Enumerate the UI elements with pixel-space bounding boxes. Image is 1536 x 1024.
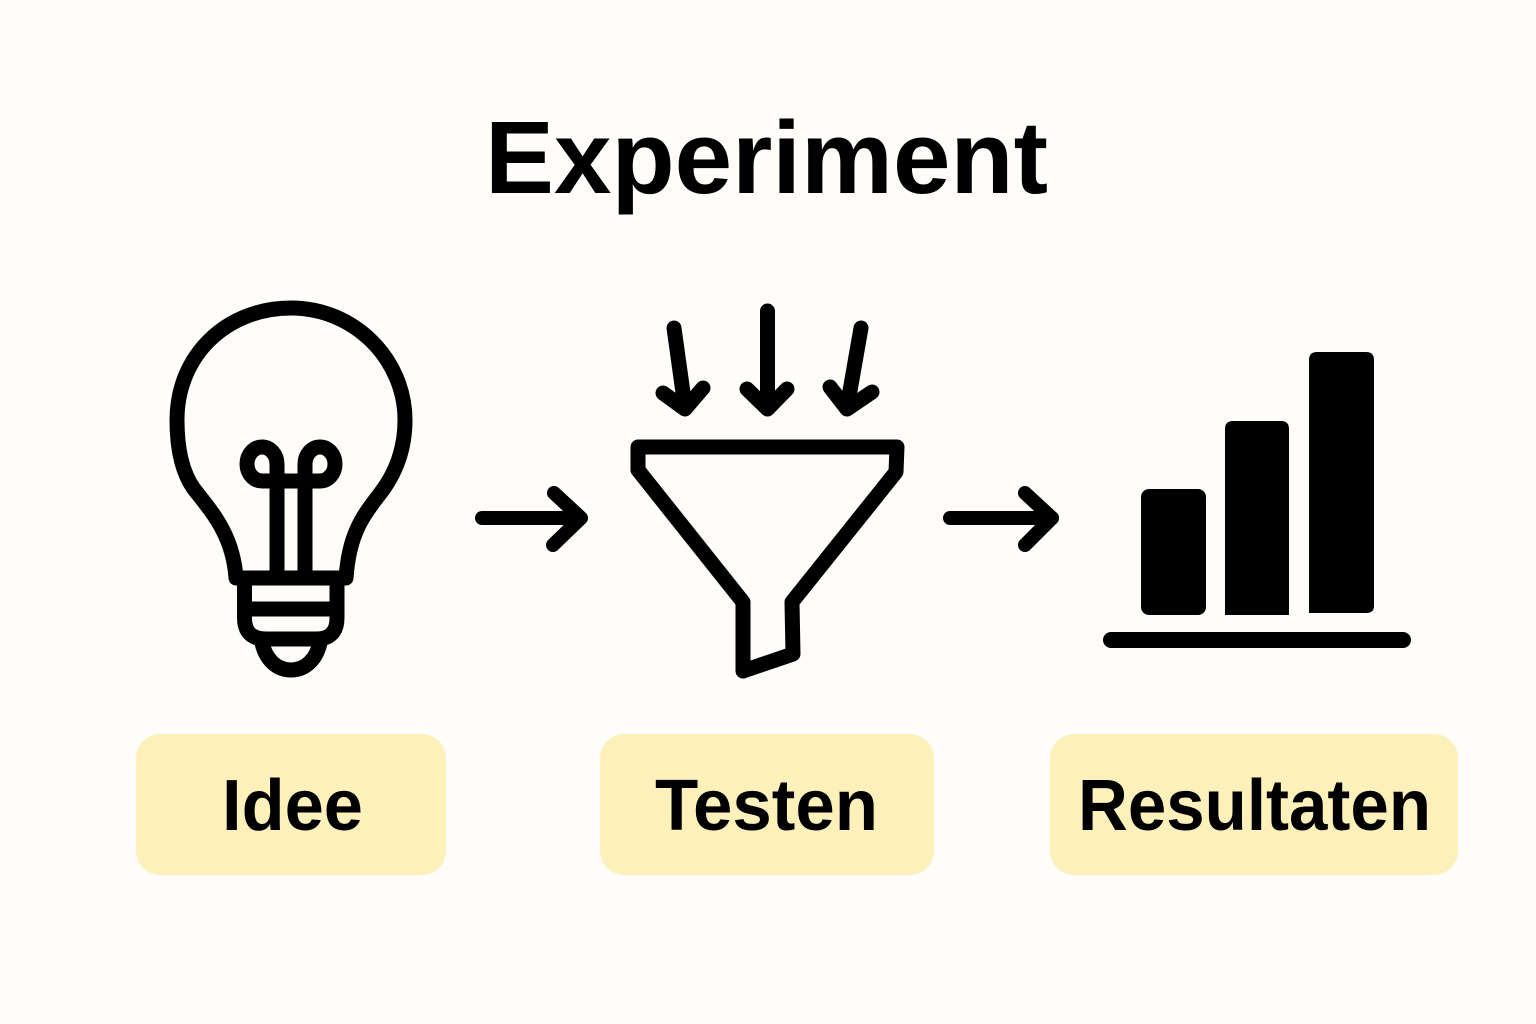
- label: Idee: Idee: [222, 766, 363, 846]
- icon: funnel with input arrows: [638, 311, 897, 671]
- label: Testen: Testen: [655, 766, 878, 846]
- icon: bar chart: [1103, 352, 1411, 648]
- label: Resultaten: [1050, 734, 1458, 875]
- input arrows: [663, 311, 872, 409]
- arrow: testing to results: [950, 493, 1052, 545]
- label: Idee: [136, 734, 446, 875]
- label: Testen: [600, 734, 934, 875]
- funnel: [638, 447, 897, 671]
- arrow: idea to testing: [482, 493, 581, 545]
- title: Experiment: [485, 100, 1048, 215]
- icon: light bulb: [177, 308, 405, 670]
- label: Resultaten: Resultaten: [1078, 766, 1431, 846]
